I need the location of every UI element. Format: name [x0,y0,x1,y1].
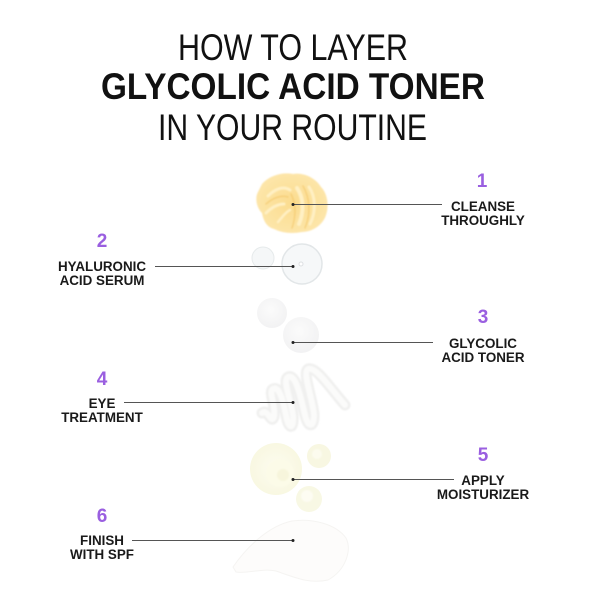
step 2 callout: HYALURONIC [58,259,146,274]
step 6 callout: 6 [97,506,107,527]
swatch: glycolic toner drops [257,298,319,353]
step 2 callout: ACID SERUM [60,273,144,288]
step 5 callout: MOISTURIZER [437,487,529,502]
swatch: yellow cleanser [256,173,328,233]
step 5 callout: APPLY [461,473,505,488]
title: HOW TO LAYER [178,27,408,68]
step 3 callout: GLYCOLIC [449,336,517,351]
title: GLYCOLIC ACID TONER [101,66,485,107]
swatch: moisturizer dollops [250,443,331,512]
step 4 callout: 4 [97,369,108,390]
swatch: SPF smear [233,520,348,581]
swatch: eye treatment squiggle [262,369,345,426]
title [101,27,485,148]
step 1 callout: 1 [477,171,488,192]
step 1 callout: THROUGHLY [441,213,525,228]
step 2 callout [58,231,294,288]
step 4 callout: EYE [89,396,115,411]
title: IN YOUR ROUTINE [158,107,427,148]
step 3 callout: ACID TONER [441,350,525,365]
step 4 callout: TREATMENT [61,410,144,425]
step 2 callout: 2 [97,231,107,252]
step 6 callout: FINISH [80,533,124,548]
step 6 callout: WITH SPF [70,547,134,562]
step 4 callout [61,369,294,425]
step 6 callout [70,506,294,562]
step 1 callout [292,171,525,228]
step 5 callout: 5 [478,445,489,466]
swatch: hyaluronic serum drops [252,244,322,284]
step 1 callout: CLEANSE [451,199,515,214]
step 3 callout: 3 [478,307,488,328]
step 3 callout [292,307,525,365]
step 5 callout [292,445,529,502]
